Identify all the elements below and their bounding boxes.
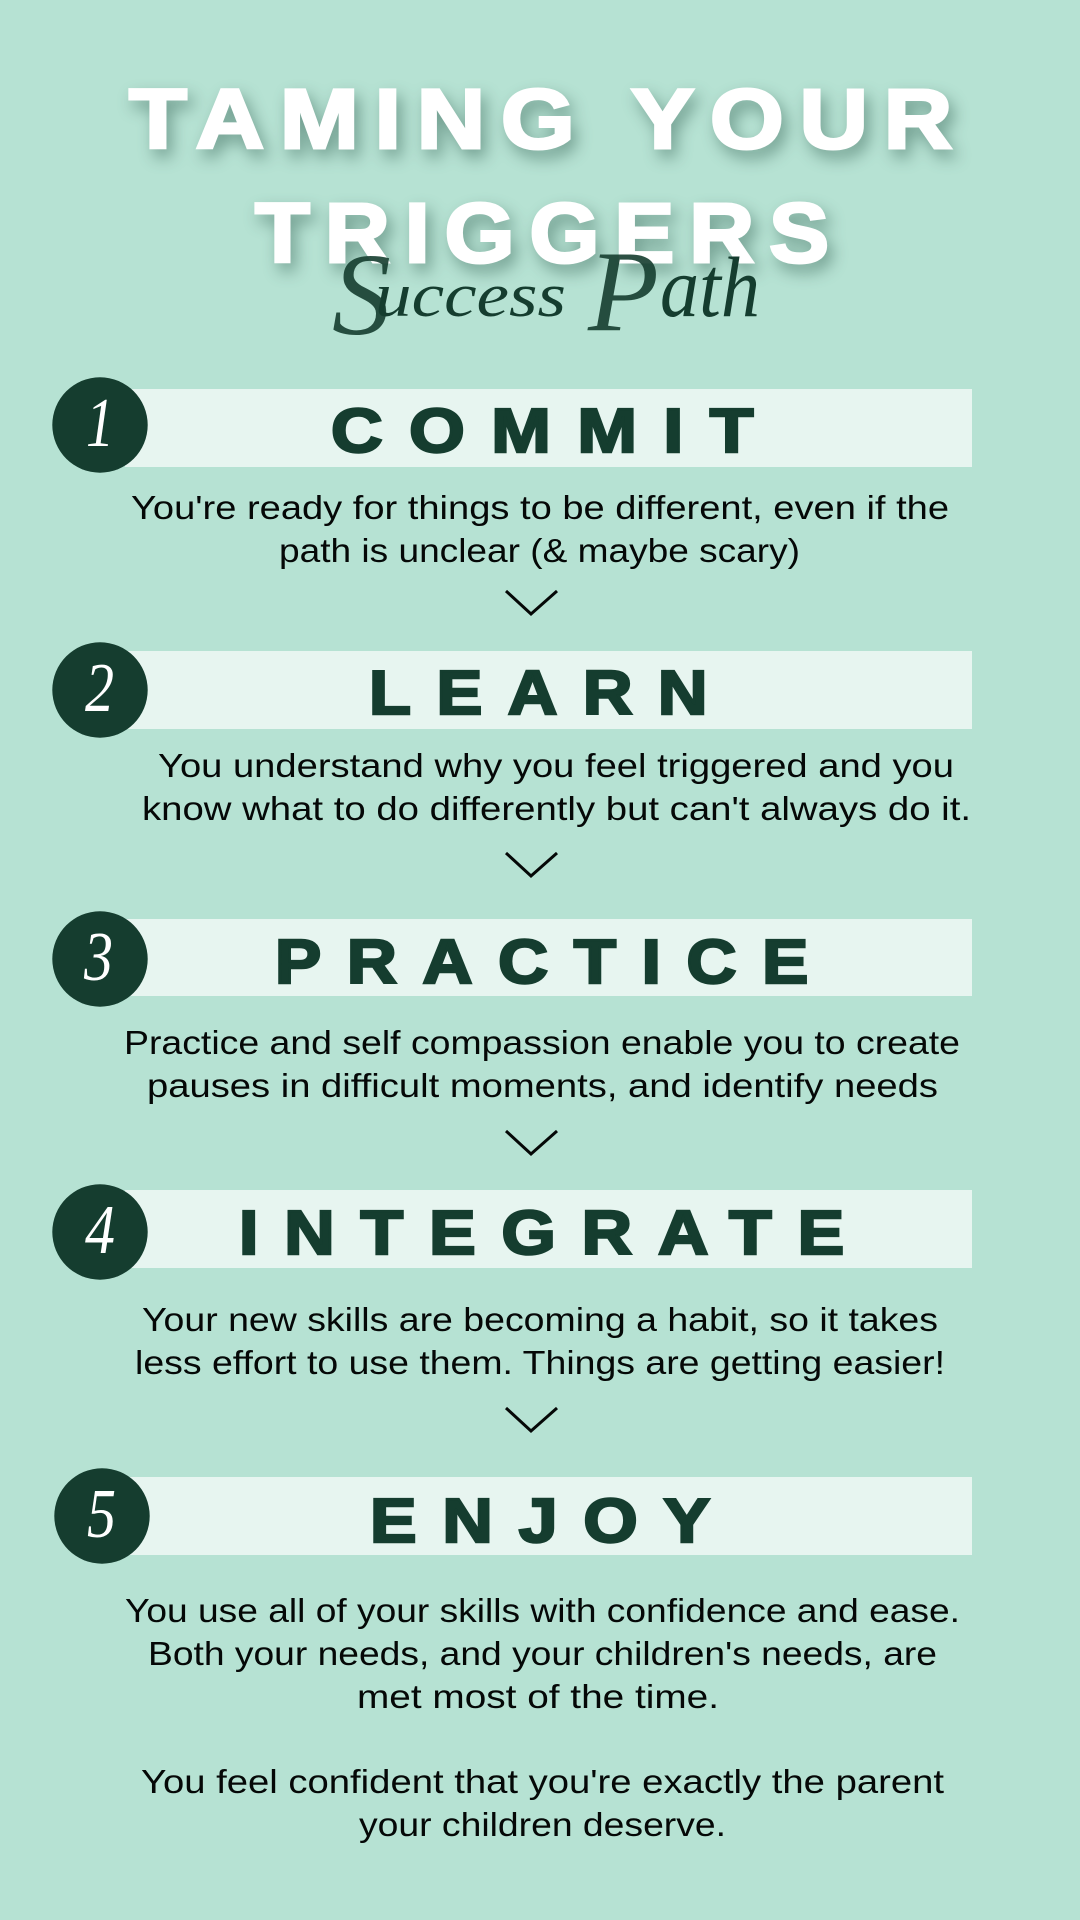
heading: integrate: INTEGRATE [239, 1199, 870, 1268]
text: integrate description [135, 1301, 945, 1381]
text: enjoy description [125, 1592, 960, 1843]
badge: number 5: 5 [87, 1476, 116, 1553]
step 3: practice [52, 911, 972, 1104]
arrow: chevron 2 [506, 853, 557, 876]
text: learn description: You understand why you feel triggered and you [158, 747, 954, 784]
text: enjoy description: You use all of your skills with confidence and ease. [125, 1592, 960, 1629]
heading: commit: COMMIT [331, 397, 780, 466]
badge: number 1: 1 [86, 385, 114, 462]
heading: enjoy: ENJOY [370, 1487, 736, 1556]
text: practice description [124, 1024, 960, 1104]
text: learn description: know what to do differently but can't always do it. [142, 790, 971, 827]
step 5: enjoy [54, 1468, 972, 1843]
banner: enjoy [125, 1477, 972, 1555]
badge: number 4: 4 [85, 1192, 115, 1269]
banner: learn [125, 651, 972, 729]
text: commit description: path is unclear (& maybe scary) [279, 532, 800, 569]
step 1: commit [52, 377, 972, 569]
subtitle: script: uccess [375, 262, 566, 330]
text: enjoy description: Both your needs, and your children's needs, are [148, 1635, 937, 1672]
title: TRIGGERS [255, 186, 844, 280]
title [129, 72, 968, 280]
text: commit description: You're ready for things to be different, even if the [131, 489, 949, 526]
text: integrate description: less effort to use them. Things are getting easier! [135, 1344, 945, 1381]
badge: number 3 [52, 911, 148, 1007]
banner: commit [125, 389, 972, 467]
title: TAMING YOUR [129, 72, 968, 166]
heading: learn: LEARN [369, 659, 733, 728]
arrow: chevron 4 [506, 1408, 557, 1431]
banner: integrate [125, 1190, 972, 1268]
badge: number 5 [54, 1468, 150, 1564]
step 2: learn [52, 642, 972, 827]
text: enjoy description: your children deserve. [359, 1806, 726, 1843]
heading: practice: PRACTICE [275, 928, 834, 997]
step 4: integrate [52, 1184, 972, 1381]
arrow: chevron 3 [506, 1131, 557, 1154]
banner: practice [125, 919, 972, 996]
subtitle: script: P [587, 228, 659, 356]
text: enjoy description: met most of the time. [357, 1678, 719, 1715]
badge: number 2: 2 [85, 650, 114, 727]
badge: number 1 [52, 377, 148, 473]
badge: number 2 [52, 642, 148, 738]
badge: number 3: 3 [83, 919, 113, 996]
text: integrate description: Your new skills are becoming a habit, so it takes [142, 1301, 938, 1338]
subtitle: script: S [332, 229, 391, 360]
text: practice description: pauses in difficult moments, and identify needs [147, 1067, 938, 1104]
arrow: chevron 1 [506, 591, 557, 614]
text: practice description: Practice and self compassion enable you to create [124, 1024, 960, 1061]
badge: number 4 [52, 1184, 148, 1280]
subtitle: script: ath [660, 239, 760, 335]
text: enjoy description: You feel confident that you're exactly the parent [141, 1763, 944, 1800]
text: learn description [142, 747, 971, 827]
text: commit description [131, 489, 949, 569]
